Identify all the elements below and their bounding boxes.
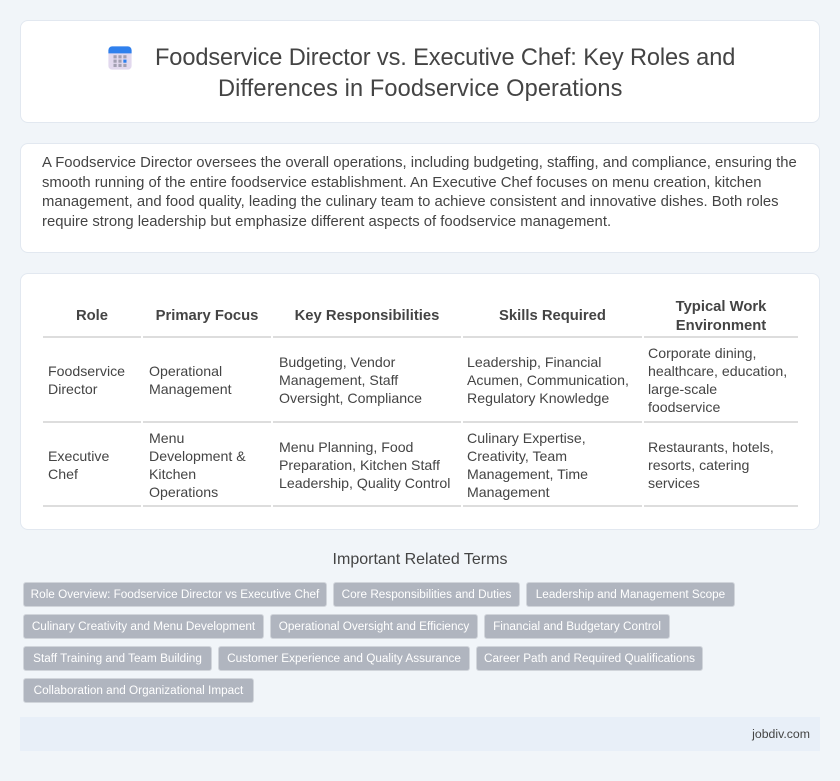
tag	[270, 614, 478, 639]
footer source: jobdiv.com	[752, 727, 810, 741]
row 2: responsibilities: Preparation, Kitchen Staff	[279, 457, 440, 473]
tag	[23, 582, 327, 607]
intro paragraph: A Foodservice Director oversees the overall operations, including budgeting, staffing, and compliance, ensuring the	[42, 155, 797, 171]
row 1: role	[48, 363, 125, 397]
intro card	[20, 143, 820, 253]
row 1: responsibilities: Management, Staff	[279, 372, 398, 388]
row 2: skills: Management, Time	[467, 466, 588, 482]
title	[155, 45, 735, 102]
tag	[218, 646, 470, 671]
related term tags	[23, 582, 735, 703]
row 2: focus: Menu	[149, 430, 184, 446]
tag: Financial and Budgetary Control	[493, 620, 661, 633]
tag: Leadership and Management Scope	[536, 588, 725, 601]
row 1: environment: large-scale	[648, 381, 717, 397]
comparison table	[43, 299, 798, 507]
row 1: skills: Acumen, Communication,	[467, 372, 629, 388]
row 1: environment: healthcare, education,	[648, 363, 787, 379]
tag	[23, 678, 254, 703]
intro paragraph	[42, 155, 797, 230]
tag	[23, 614, 264, 639]
header: Typical Work Environment: Typical Work	[676, 299, 766, 315]
intro paragraph: require strong leadership but emphasize different aspects of foodservice management.	[42, 214, 611, 230]
row 2: role	[48, 448, 109, 482]
row 2: skills: Culinary Expertise,	[467, 430, 586, 446]
row 2: environment	[648, 439, 774, 491]
row 1: responsibilities: Oversight, Compliance	[279, 390, 422, 406]
row 2: role: Chef	[48, 466, 78, 482]
row 1: focus	[149, 363, 232, 397]
tag	[333, 582, 520, 607]
row 2: focus: Kitchen	[149, 466, 196, 482]
row 1: skills: Regulatory Knowledge	[467, 390, 609, 406]
row 2: focus: Operations	[149, 484, 218, 500]
row 1: responsibilities: Budgeting, Vendor	[279, 354, 395, 370]
tag	[23, 646, 212, 671]
tag: Career Path and Required Qualifications	[484, 652, 695, 665]
row 2: environment: Restaurants, hotels,	[648, 439, 774, 455]
row 2: responsibilities: Menu Planning, Food	[279, 439, 413, 455]
row 2: environment: services	[648, 475, 700, 491]
title: Foodservice Director vs. Executive Chef: Key Roles and	[155, 45, 735, 71]
footer	[20, 717, 820, 751]
row 2: role: Executive	[48, 448, 109, 464]
tag	[476, 646, 703, 671]
tag: Staff Training and Team Building	[33, 652, 202, 665]
row 1: focus: Management	[149, 381, 232, 397]
header: Role: Role	[76, 308, 108, 324]
row 1: skills	[467, 354, 629, 406]
tag: Operational Oversight and Efficiency	[279, 620, 469, 633]
row 1: role: Foodservice	[48, 363, 125, 379]
intro paragraph: smooth running of the entire foodservice establishment. An Executive Chef focuses on menu creation, kitchen	[42, 174, 762, 190]
row 2: focus	[149, 430, 246, 500]
tag: Customer Experience and Quality Assurance	[227, 652, 461, 665]
related terms heading: Important Related Terms	[333, 551, 507, 568]
intro paragraph: management, and food quality, leading the culinary team to achieve consistent and innovative dishes. Both roles	[42, 194, 779, 210]
header: Primary Focus: Primary Focus	[156, 308, 258, 324]
row 1: skills: Leadership, Financial	[467, 354, 601, 370]
icon: calendar	[108, 46, 132, 70]
title: Differences in Foodservice Operations	[218, 76, 623, 102]
table card	[20, 273, 820, 530]
row 2: skills: Management	[467, 484, 550, 500]
row 1: environment: foodservice	[648, 399, 720, 415]
row 2: skills	[467, 430, 588, 500]
tag: Culinary Creativity and Menu Development	[32, 620, 255, 633]
row 2: focus: Development &	[149, 448, 246, 464]
tag: Core Responsibilities and Duties	[342, 588, 511, 601]
row 1: role: Director	[48, 381, 98, 397]
row 2: responsibilities: Leadership, Quality Control	[279, 475, 450, 491]
row 2: skills: Creativity, Team	[467, 448, 567, 464]
tag	[484, 614, 670, 639]
row 1: environment: Corporate dining,	[648, 345, 756, 361]
header: Typical Work Environment	[676, 299, 766, 334]
row 1: responsibilities	[279, 354, 422, 406]
header card	[20, 20, 820, 123]
header: Key Responsibilities: Key Responsibilities	[295, 308, 439, 324]
tag: Collaboration and Organizational Impact	[34, 684, 243, 697]
row 1: environment	[648, 345, 787, 415]
tag	[526, 582, 735, 607]
header: Typical Work Environment: Environment	[676, 318, 766, 334]
row 1: focus: Operational	[149, 363, 222, 379]
tag: Role Overview: Foodservice Director vs Executive Chef	[31, 588, 319, 601]
header: Skills Required: Skills Required	[499, 308, 606, 324]
row 2: environment: resorts, catering	[648, 457, 749, 473]
row 2: responsibilities	[279, 439, 450, 491]
